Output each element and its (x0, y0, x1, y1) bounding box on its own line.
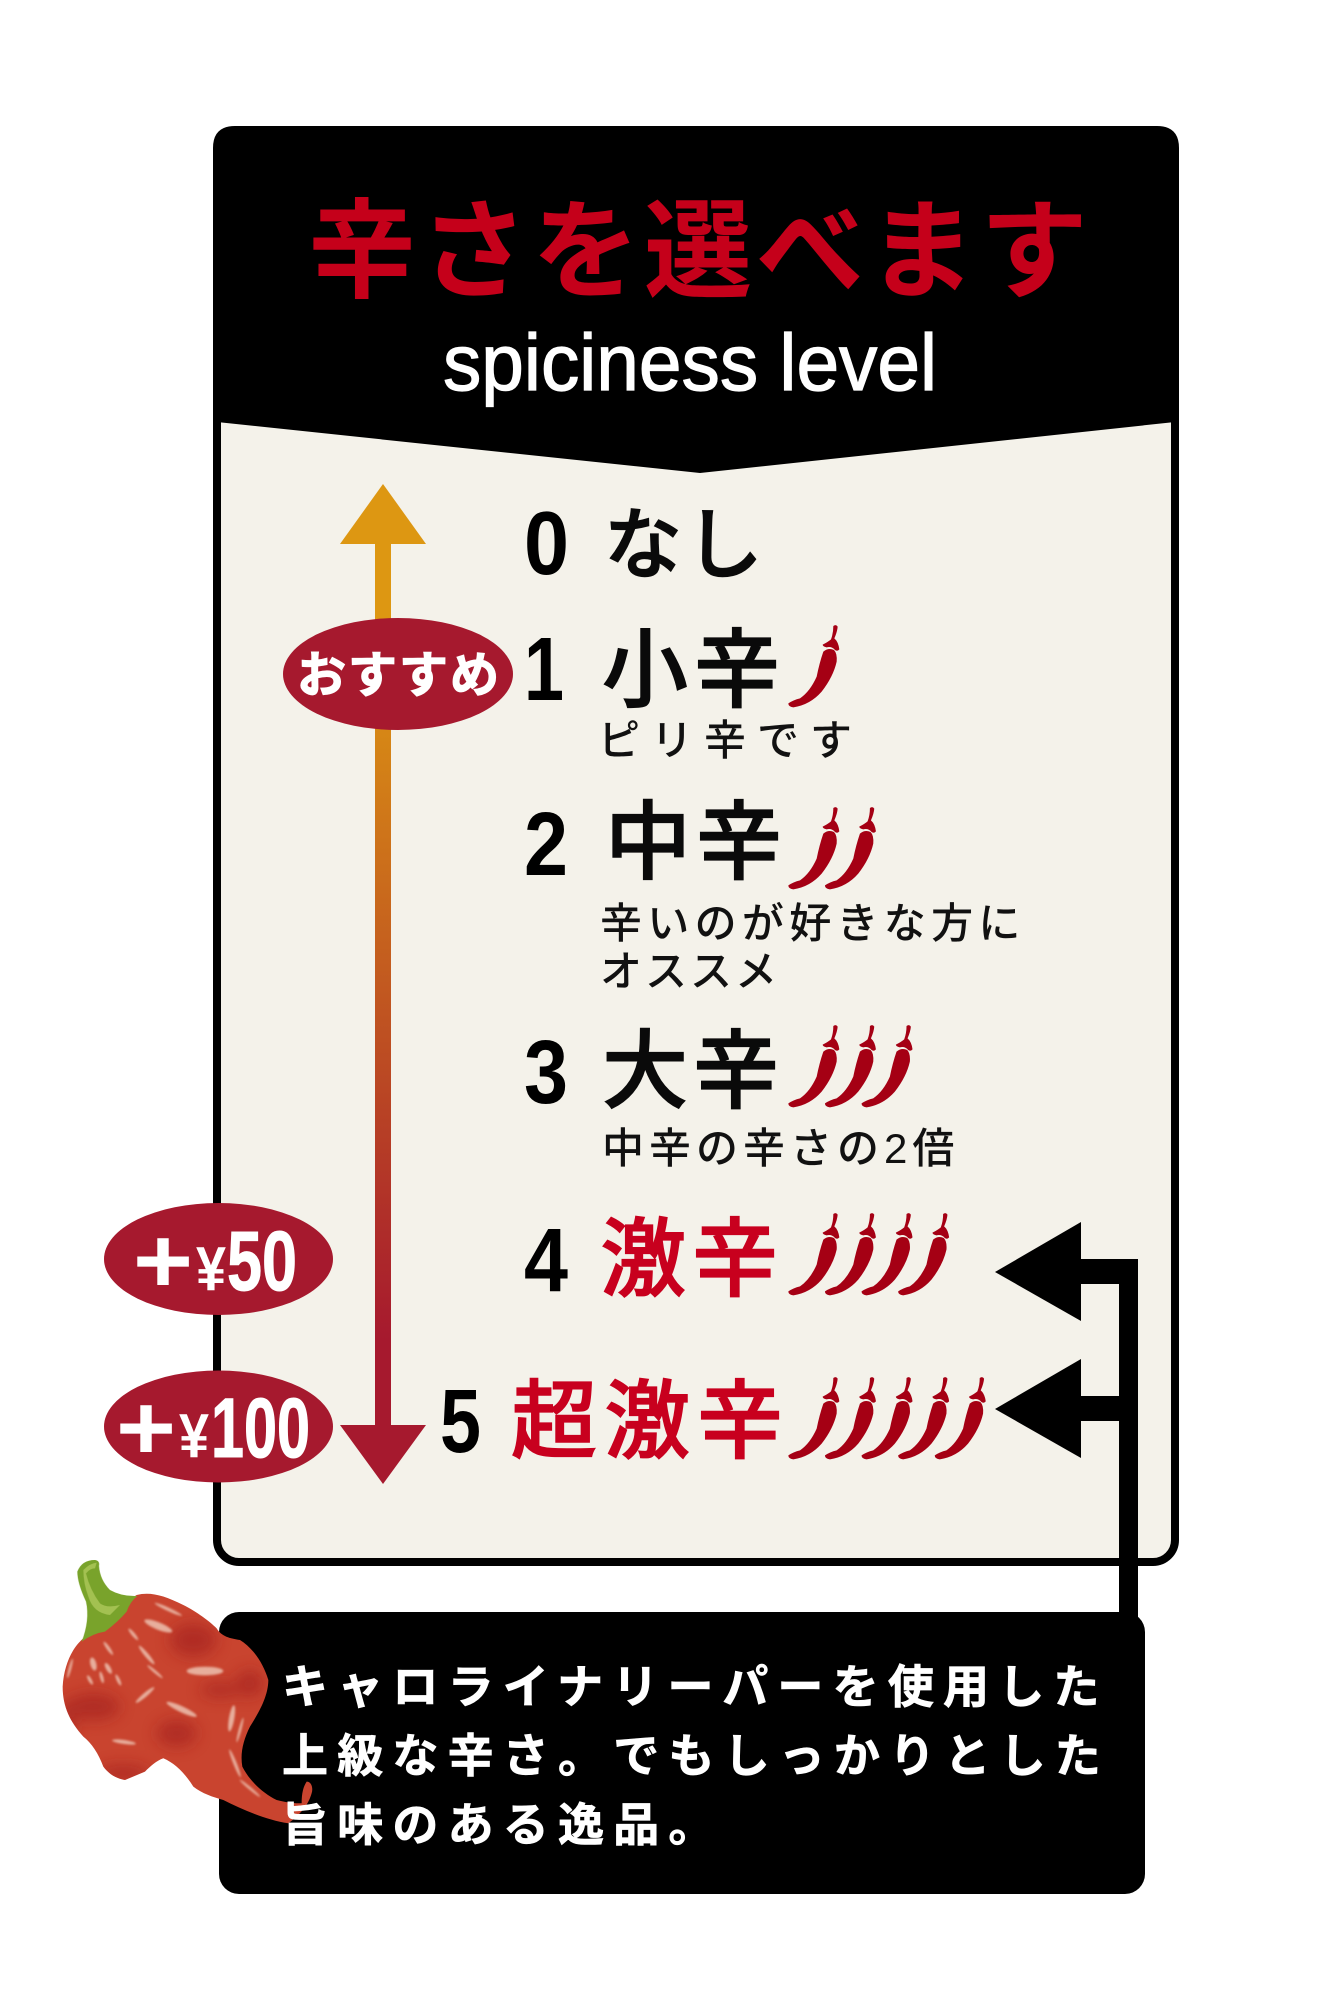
level 0: なし (604, 501, 766, 589)
icon: three chilies (788, 1025, 913, 1107)
price badge +50: ¥ (196, 1235, 226, 1304)
level 2: 中辛 (605, 795, 787, 891)
level 1 (524, 620, 863, 764)
description text: 上級な辛さ。でもしっかりとした (282, 1730, 1110, 1782)
icon: one chili (788, 625, 839, 707)
price badge +50 (104, 1203, 333, 1315)
recommended badge (283, 618, 513, 730)
level 2: 辛いのが好きな方に (600, 900, 1026, 947)
panel: spiciness level card (217, 130, 1175, 1562)
price badge +50: + (133, 1210, 193, 1312)
recommended badge: おすすめ (297, 649, 499, 703)
level 3: 中辛の辛さの2倍 (602, 1125, 959, 1172)
bracket arrows pointing to levels 4 and 5 (995, 1222, 1138, 1619)
level 5 (440, 1372, 986, 1472)
description text: キャロライナリーパーを使用した (282, 1661, 1109, 1713)
illustration: carolina reaper pepper (58, 1560, 312, 1823)
level 5: 5 (440, 1372, 481, 1472)
level 4: 激辛 (600, 1212, 784, 1308)
title: 辛さを選べます (308, 191, 1092, 312)
level 3: 3 (524, 1023, 568, 1123)
header: black banner with chevron (213, 126, 1179, 473)
subtitle: spiciness level (443, 318, 937, 407)
icon: five chilies (788, 1377, 986, 1459)
level 4 (524, 1211, 949, 1311)
price badge +100 (104, 1370, 333, 1482)
icon: four chilies (788, 1213, 949, 1295)
level 2 (524, 795, 1026, 995)
description text (282, 1661, 1110, 1851)
level 3: 大辛 (602, 1024, 784, 1120)
level 4: 4 (524, 1211, 568, 1311)
description text: 旨味のある逸品。 (282, 1799, 724, 1851)
level 0: 0 (524, 494, 569, 594)
gradient double-headed arrow (340, 484, 426, 1484)
level 3 (524, 1023, 959, 1172)
icon: two chilies (788, 807, 876, 889)
level 0 (524, 494, 766, 594)
level 2: 2 (524, 795, 568, 895)
price badge +100: + (116, 1377, 176, 1479)
panel: black description box (219, 1612, 1145, 1894)
price badge +50: 50 (227, 1214, 297, 1308)
level 1: 小辛 (602, 623, 786, 719)
level 2: オススメ (600, 948, 780, 995)
price badge +100: 100 (211, 1381, 310, 1475)
price badge +100: ¥ (179, 1402, 209, 1471)
level 1: ピリ辛です (598, 717, 863, 764)
level 5: 超激辛 (511, 1374, 790, 1470)
level 1: 1 (524, 620, 564, 720)
